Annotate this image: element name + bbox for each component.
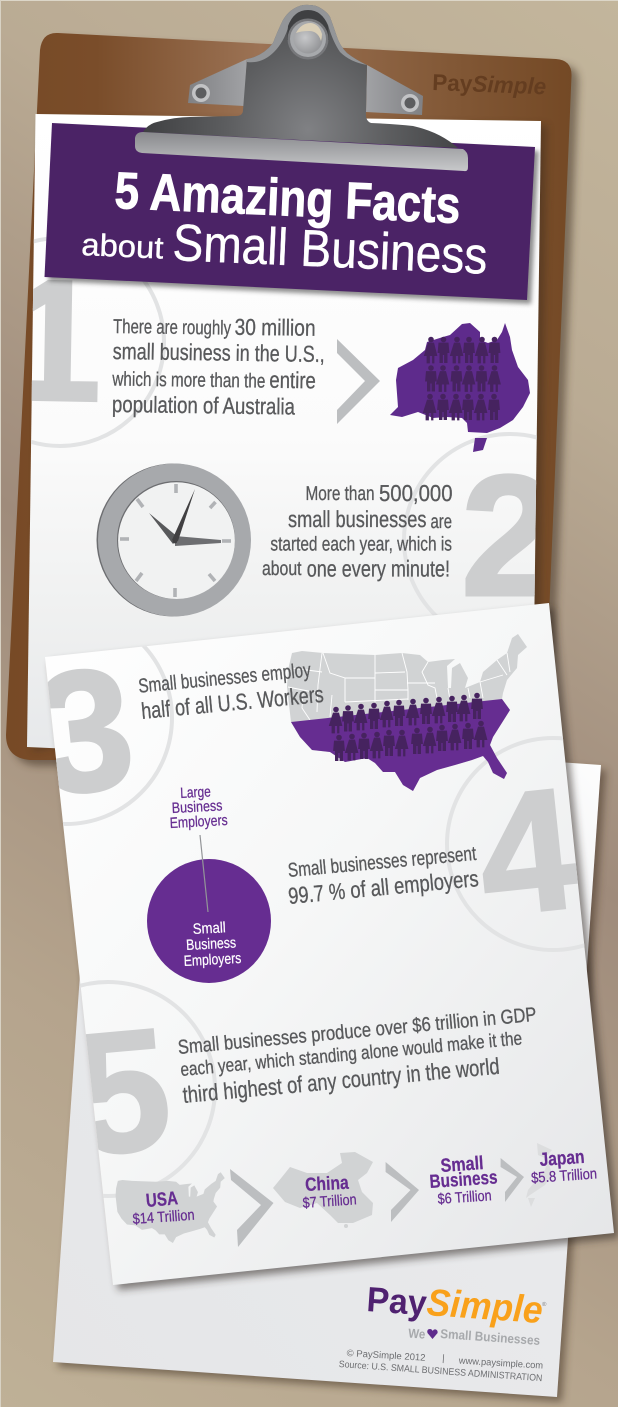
fact 1 text: small business in the U.S.,	[113, 338, 325, 367]
pie label: large business employers: Employers	[169, 812, 228, 832]
title line 2: about	[81, 227, 165, 266]
logo: PaySimple: ®	[542, 1301, 547, 1308]
pie label: small business employers: Business	[186, 934, 237, 954]
pie label: large business employers: Large	[180, 783, 211, 802]
icon: metal clip	[135, 5, 468, 171]
GDP comparison: China: China	[305, 1173, 350, 1196]
pie label: small business employers	[183, 919, 242, 970]
fact 1 text	[111, 312, 325, 420]
fact 3 text	[137, 659, 325, 724]
fact 2 text: More than	[306, 483, 374, 505]
arrow	[230, 1169, 274, 1247]
panel: back sheet with logo	[53, 730, 606, 1402]
pie label: large business employers: Business	[171, 797, 223, 817]
fact 1 text: population of Australia	[112, 391, 295, 420]
GDP comparison: USA: USA	[145, 1188, 179, 1212]
fact 1 text: entire	[269, 367, 316, 393]
clip rivets	[192, 84, 419, 112]
fact 3 number	[48, 646, 174, 826]
fact 5 text: third highest of any country in the world	[182, 1053, 501, 1108]
fact 2 text: about	[262, 558, 302, 580]
icon: clock	[96, 464, 251, 616]
map: United States half purple with people	[287, 634, 527, 791]
arrow	[501, 1158, 524, 1202]
GDP comparison: small business: Business	[429, 1167, 498, 1193]
fact 4 text: 99.7 % of all employers	[287, 865, 480, 909]
fact 2 text: are	[430, 511, 452, 533]
GDP comparison: Japan: Japan	[539, 1147, 585, 1171]
fact 4 text: Small businesses represent	[287, 843, 478, 882]
fact 1 text: which is more than the	[111, 368, 265, 393]
logo: PaySimple: Pay	[365, 1280, 429, 1323]
fact 5 text	[177, 1004, 537, 1108]
tagline: Small Businesses	[440, 1326, 541, 1348]
GDP comparison: China: $7 Trillion	[302, 1191, 357, 1212]
arrow	[386, 1162, 419, 1222]
pie label: small business employers: Employers	[183, 950, 242, 970]
tagline: We	[408, 1326, 426, 1342]
tagline	[408, 1326, 541, 1348]
fact 2 number: 2	[461, 440, 557, 632]
map: Australia with people	[390, 323, 530, 452]
panel: top sheet with facts 1 and 2	[27, 114, 549, 752]
fact 2 text: started each year, which is	[270, 534, 452, 556]
title banner	[44, 123, 539, 304]
fact 1 number	[31, 237, 166, 448]
logo: PaySimple: Simple	[425, 1282, 544, 1332]
GDP comparison: Japan: $5.8 Trillion	[531, 1165, 598, 1187]
title line 2: Small Business	[171, 214, 489, 286]
credits: www.paysimple.com	[457, 1355, 544, 1372]
GDP comparison: China	[273, 1152, 373, 1228]
fact 1 number: 1	[4, 244, 103, 438]
fact 5 number	[80, 980, 217, 1198]
fact 3 text: Small businesses employ	[137, 659, 312, 698]
credits: Source: U.S. SMALL BUSINESS ADMINISTRATION	[338, 1359, 543, 1384]
GDP comparison: USA	[116, 1172, 225, 1243]
fact 2 text: 500,000	[379, 480, 452, 506]
fact 3 number: 3	[27, 631, 142, 832]
title line 1: 5 Amazing Facts	[113, 162, 462, 235]
chevron arrow	[337, 339, 380, 424]
embossed logo: PaySimple	[432, 69, 547, 99]
fact 3 text: half of all U.S. Workers	[140, 681, 325, 724]
fact 2 text	[262, 480, 452, 582]
logo: PaySimple	[365, 1280, 547, 1332]
fact 2 text: one every minute!	[307, 556, 450, 582]
GDP comparison: Japan	[526, 1143, 598, 1207]
fact 1 text: 30 million	[234, 314, 316, 341]
GDP comparison: small business: Small	[440, 1153, 484, 1177]
credits: © PaySimple 2012	[346, 1348, 426, 1364]
fact 4 text	[287, 843, 480, 909]
fact 5 text: each year, which standing alone would make it the	[180, 1028, 523, 1081]
title line 2	[81, 214, 489, 286]
fact 2 text: small businesses	[288, 506, 426, 532]
panel: front sheet with facts 3, 4 and 5	[0, 603, 618, 1290]
GDP comparison: USA: $14 Trillion	[132, 1207, 195, 1228]
GDP comparison: small business	[429, 1153, 498, 1208]
fact 4 number: 4	[470, 752, 585, 953]
fact 5 text: Small businesses produce over $6 trillion in GDP	[177, 1004, 537, 1059]
fact 1 text: There are roughly	[113, 316, 231, 340]
fact 2 number	[402, 432, 537, 616]
fact 5 number: 5	[65, 992, 178, 1192]
pie chart	[147, 783, 271, 983]
pie label: large business employers	[169, 783, 228, 832]
credits	[338, 1348, 544, 1384]
GDP comparison: small business: $6 Trillion	[437, 1187, 492, 1208]
credits: |	[442, 1353, 445, 1364]
pie label: small business employers: Small	[192, 919, 226, 938]
